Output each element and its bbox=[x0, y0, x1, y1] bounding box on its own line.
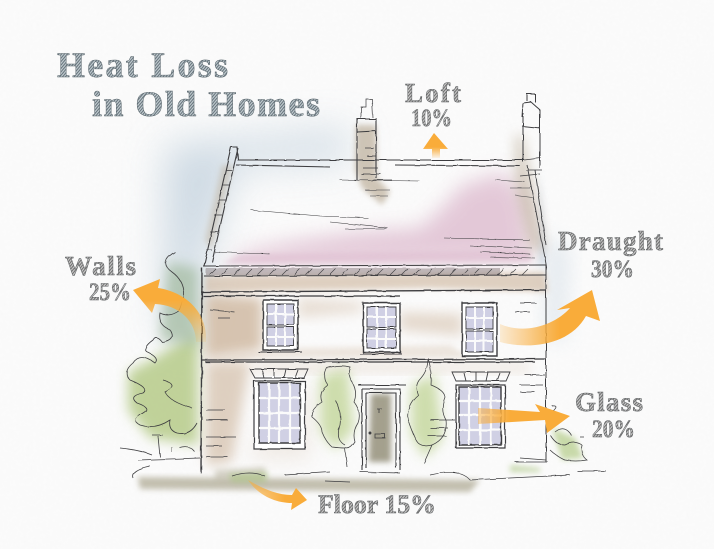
central left tree bbox=[312, 366, 359, 467]
upper right window bbox=[462, 303, 497, 356]
wash: pink roof bbox=[222, 172, 532, 264]
right shrub bbox=[550, 406, 587, 461]
label: glass 20%: Glass bbox=[575, 387, 643, 417]
arrow: loft bbox=[423, 133, 448, 158]
watercolour washes bbox=[128, 125, 583, 492]
title: in Old Homes bbox=[92, 84, 320, 124]
label: walls 25% bbox=[65, 251, 136, 306]
house line drawing bbox=[120, 94, 606, 482]
upper middle window bbox=[360, 303, 402, 354]
left climbing tree bbox=[127, 252, 197, 457]
wash: blue sky bbox=[165, 130, 570, 345]
label: draught 30%: Draught bbox=[558, 226, 663, 256]
label: walls 25%: 25% bbox=[89, 279, 131, 306]
left chimney bbox=[357, 99, 392, 180]
wash: ground bbox=[138, 467, 480, 492]
right chimney bbox=[520, 94, 542, 176]
title bbox=[57, 45, 320, 124]
wash: green foliage bbox=[128, 262, 583, 482]
wash: door bbox=[369, 394, 391, 462]
garden marks left bbox=[120, 447, 200, 478]
label: loft 10%: 10% bbox=[411, 105, 452, 132]
label: loft 10% bbox=[405, 78, 461, 132]
wash: chimney shadows bbox=[205, 125, 545, 250]
label: loft 10%: Loft bbox=[405, 78, 461, 108]
wash: tan walls bbox=[205, 272, 548, 466]
lower left window bbox=[250, 369, 308, 449]
arrow: floor bbox=[248, 480, 307, 510]
central right tree bbox=[408, 358, 455, 463]
title: Heat Loss bbox=[57, 45, 228, 85]
label: floor 15%: Floor 15% bbox=[318, 490, 436, 519]
label: draught 30%: 30% bbox=[591, 256, 634, 283]
roof outline bbox=[203, 147, 547, 276]
upper left window bbox=[258, 300, 302, 352]
door bbox=[358, 385, 406, 470]
arrow: draught bbox=[500, 290, 600, 345]
arrow: glass bbox=[478, 404, 570, 433]
label: draught 30% bbox=[558, 226, 663, 283]
lower right window bbox=[452, 372, 510, 448]
label: glass 20% bbox=[575, 387, 643, 443]
label: glass 20%: 20% bbox=[592, 416, 635, 443]
label: walls 25%: Walls bbox=[65, 251, 136, 281]
ground lines bbox=[232, 458, 606, 482]
walls and bands bbox=[201, 265, 546, 473]
arrow: walls bbox=[133, 279, 206, 342]
